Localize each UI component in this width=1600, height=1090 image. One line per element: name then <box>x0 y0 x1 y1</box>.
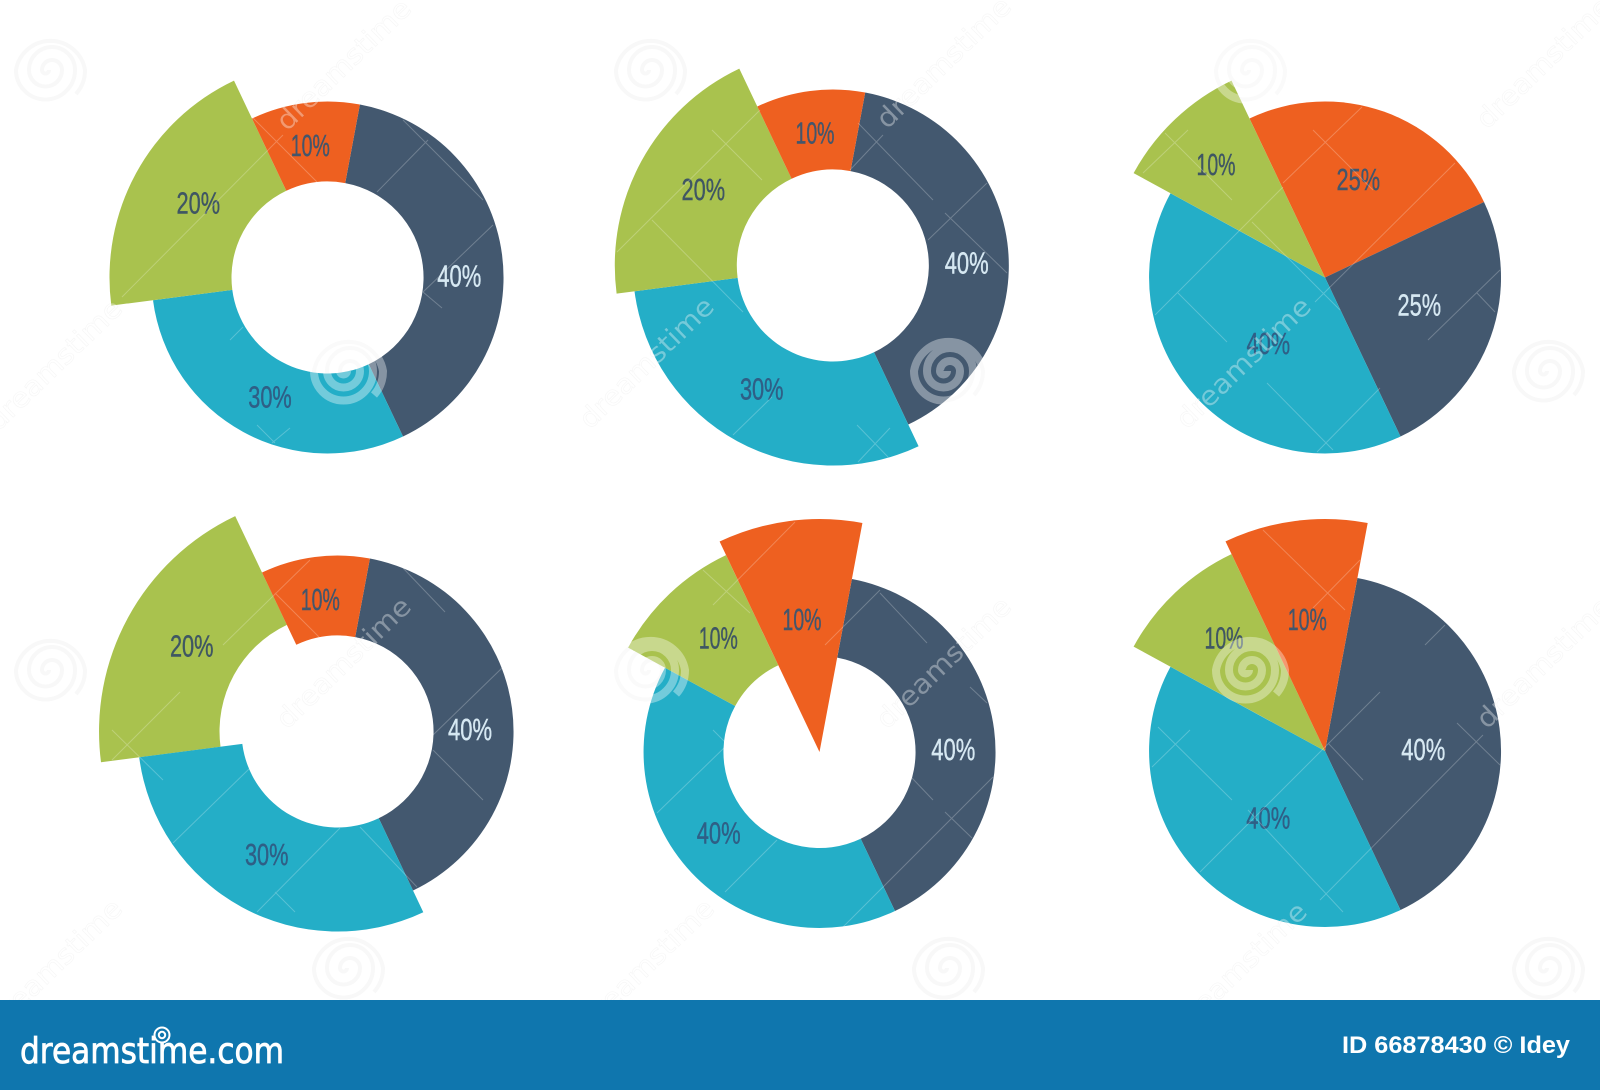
label 25% orange: 25% <box>1337 162 1380 197</box>
watermark: dreamstime diagonal text: dreamstime <box>870 0 1018 135</box>
label 20%: 20% <box>177 185 220 220</box>
brand logo text: dreamstime.com <box>20 1031 284 1072</box>
slice: navy 40% <box>850 92 1009 424</box>
slice: green 10% <box>628 555 778 706</box>
slice: cyan 30% <box>153 290 403 454</box>
slice: navy 40% <box>1325 578 1501 910</box>
slice: cyan 30% <box>634 278 919 466</box>
slice: orange 10% <box>252 101 360 191</box>
label 10% green: 10% <box>699 620 738 655</box>
label 25% navy: 25% <box>1398 288 1441 323</box>
chart 4: donut with thick offset green slice <box>99 516 514 932</box>
watermark: dreamstime diagonal text: dreamstime <box>1166 896 1314 1040</box>
slice: cyan 30% <box>139 744 423 932</box>
chart 1: donut with raised green slice <box>109 81 504 454</box>
chart 6: pie with raised green and orange slices <box>1134 519 1501 927</box>
label 10%: 10% <box>291 128 330 163</box>
slice: navy 40% <box>837 579 996 911</box>
slice: orange 10% <box>720 519 862 752</box>
chart 2: donut with raised green and cyan slices <box>615 69 1009 466</box>
label 40% navy: 40% <box>1401 732 1445 767</box>
label 20%: 20% <box>682 172 725 207</box>
label 10%: 10% <box>301 582 340 617</box>
slice: cyan 40% <box>644 668 895 928</box>
watermark: dreamstime diagonal text: dreamstime <box>573 893 721 1037</box>
slice: green 10% <box>1134 554 1325 751</box>
chart 3: pie with raised green slice <box>1134 81 1501 453</box>
watermark: dreamstime diagonal text: dreamstime <box>1170 291 1318 435</box>
slice: green 10% <box>1134 81 1325 278</box>
label 40% cyan: 40% <box>1246 800 1290 835</box>
slice: orange 10% <box>757 89 865 179</box>
slice: orange 10% <box>262 555 370 645</box>
label 10% orange: 10% <box>782 602 822 637</box>
watermark: dreamstime diagonal text: dreamstime <box>270 0 418 137</box>
label 30%: 30% <box>740 371 783 406</box>
label 10% orange: 10% <box>1288 602 1327 637</box>
watermark: dreamstime diagonal text: dreamstime <box>573 291 721 435</box>
slice: navy 40% <box>355 558 514 890</box>
watermark: thin diagonal lines <box>112 107 1500 927</box>
label 10%: 10% <box>1196 147 1236 182</box>
slice: green 20% <box>109 81 286 306</box>
label 40%: 40% <box>945 245 989 280</box>
label 10%: 10% <box>796 115 834 150</box>
slice: navy 40% <box>345 104 504 436</box>
label 20%: 20% <box>170 629 213 664</box>
image id and credit: ID 66878430 © Idey <box>1342 1032 1571 1059</box>
watermark: spirals over charts <box>314 41 1285 700</box>
slice: cyan 40% <box>1149 193 1400 453</box>
label 30%: 30% <box>245 837 288 872</box>
footer banner <box>0 1000 1600 1090</box>
slice: green 20% <box>99 516 287 762</box>
label 40% navy: 40% <box>931 732 975 767</box>
label 40%: 40% <box>437 259 481 294</box>
slice: orange 25% <box>1250 101 1484 278</box>
chart 5: donut with orange wedge reaching the centre <box>628 519 996 928</box>
watermark: dreamstime diagonal text: dreamstime <box>870 591 1018 735</box>
watermark: dreamstime diagonal text: dreamstime <box>270 591 418 735</box>
slice: cyan 40% <box>1149 667 1400 927</box>
icon: logo spiral <box>154 1028 170 1042</box>
slice: navy 25% <box>1325 202 1501 436</box>
slice: green 20% <box>615 69 792 294</box>
label 30%: 30% <box>248 379 292 414</box>
label 10% green: 10% <box>1204 620 1244 655</box>
label 40% cyan: 40% <box>697 815 741 850</box>
label 40%: 40% <box>448 712 492 747</box>
slice: orange 10% <box>1226 519 1368 751</box>
label 40%: 40% <box>1247 326 1290 361</box>
